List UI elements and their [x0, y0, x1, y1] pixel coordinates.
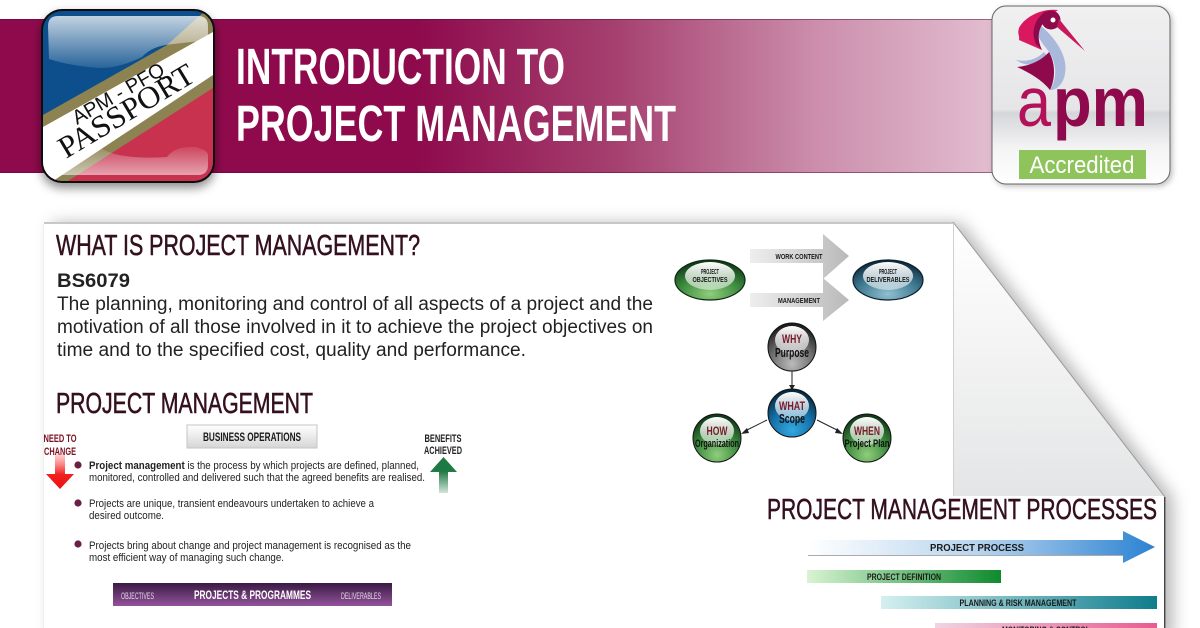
- title: [236, 38, 676, 152]
- node: what: Scope: [779, 412, 805, 426]
- node: how: Organization: [695, 438, 739, 450]
- badge text: PASSPORT: [52, 56, 201, 165]
- arrows between nodes: [741, 371, 843, 434]
- node: how: [693, 414, 741, 462]
- label: need to change: NEED TO: [44, 433, 77, 445]
- heading: what is project management: WHAT IS PROJECT MANAGEMENT?: [56, 230, 420, 262]
- bullet list: Projects bring about change and project management is recognised as the: [89, 540, 411, 552]
- bar: planning and risk management: PLANNING & RISK MANAGEMENT: [960, 598, 1077, 609]
- bullet list: monitored, controlled and delivered such that the agreed benefits are realised.: [89, 472, 425, 484]
- node: project deliverables: [853, 260, 923, 300]
- diagram: why what how when: [693, 323, 891, 462]
- bar: project definition: [807, 570, 1001, 583]
- arrow: green up: [430, 457, 457, 493]
- node: project objectives: OBJECTIVES: [692, 275, 728, 284]
- text block: BS6079 definition: time and to the specified cost, quality and performance.: [57, 340, 526, 361]
- label: need to change: CHANGE: [44, 446, 76, 458]
- heading: project management: PROJECT MANAGEMENT: [56, 388, 313, 420]
- badge text: APM - PFQ: [68, 59, 169, 129]
- arrow: red down: [46, 453, 74, 489]
- node: why: [768, 323, 816, 371]
- bar: monitoring and control: [935, 623, 1157, 628]
- node: when: Project Plan: [844, 438, 890, 450]
- arrow: work content: WORK CONTENT: [776, 252, 823, 261]
- apm wordmark: a: [1017, 63, 1051, 141]
- text block: BS6079 definition: [57, 271, 653, 361]
- node: project objectives: PROJECT: [701, 267, 719, 276]
- text block: BS6079 definition: BS6079: [57, 271, 130, 292]
- arrow: project process: [808, 531, 1155, 563]
- arrow: management: [750, 278, 849, 321]
- arrow: work content: [750, 234, 849, 279]
- text block: BS6079 definition: motivation of all those involved in it to achieve the project objectives on: [57, 317, 653, 338]
- bar: project definition: PROJECT DEFINITION: [867, 572, 941, 583]
- label: benefits achieved: ACHIEVED: [424, 445, 462, 457]
- bar: projects and programmes: OBJECTIVES: [121, 591, 154, 601]
- apm wordmark: [1017, 63, 1148, 141]
- node: when: WHEN: [854, 424, 880, 438]
- node: why: Purpose: [775, 346, 809, 360]
- title: PROJECT MANAGEMENT: [236, 95, 676, 152]
- title: INTRODUCTION TO: [236, 38, 565, 95]
- panel: document page: [43, 222, 1165, 628]
- label: benefits achieved: BENEFITS: [424, 433, 462, 445]
- accredited label: Accredited: [1030, 152, 1134, 179]
- diagram: objectives to deliverables: [675, 234, 923, 321]
- icon: APM accredited logo: [992, 6, 1170, 184]
- box: business operations: BUSINESS OPERATIONS: [203, 432, 301, 444]
- arrow: project process: PROJECT PROCESS: [930, 542, 1024, 554]
- bullet list: Projects are unique, transient endeavours undertaken to achieve a: [89, 498, 375, 510]
- label: need to change: [44, 433, 77, 458]
- node: project deliverables: DELIVERABLES: [866, 275, 910, 284]
- bird mark: [1016, 10, 1085, 90]
- node: when: [843, 414, 891, 462]
- bullet list: [74, 460, 425, 564]
- node: what: [768, 389, 816, 437]
- bullet list: most efficient way of managing such change.: [89, 552, 284, 564]
- label: benefits achieved: [424, 433, 462, 457]
- bar: projects and programmes: PROJECTS & PROGRAMMES: [194, 588, 311, 602]
- box: business operations: [187, 425, 317, 448]
- node: project deliverables: PROJECT: [879, 267, 897, 276]
- bar: planning and risk management: [881, 596, 1157, 609]
- bar: projects and programmes: [113, 583, 392, 606]
- bar: projects and programmes: DELIVERABLES: [341, 591, 381, 601]
- node: what: WHAT: [779, 399, 805, 413]
- arrow: management: MANAGEMENT: [778, 296, 820, 305]
- node: why: WHY: [782, 332, 802, 346]
- node: how: HOW: [706, 424, 728, 438]
- icon: APM-PFQ passport badge: [41, 9, 215, 183]
- text block: BS6079 definition: The planning, monitoring and control of all aspects of a project and the: [57, 294, 653, 315]
- node: project objectives: [675, 260, 745, 300]
- header banner: [0, 19, 992, 173]
- apm wordmark: pm: [1053, 63, 1148, 141]
- bullet list: desired outcome.: [89, 510, 164, 522]
- bullet list: Project management is the process by which projects are defined, planned,: [89, 460, 419, 472]
